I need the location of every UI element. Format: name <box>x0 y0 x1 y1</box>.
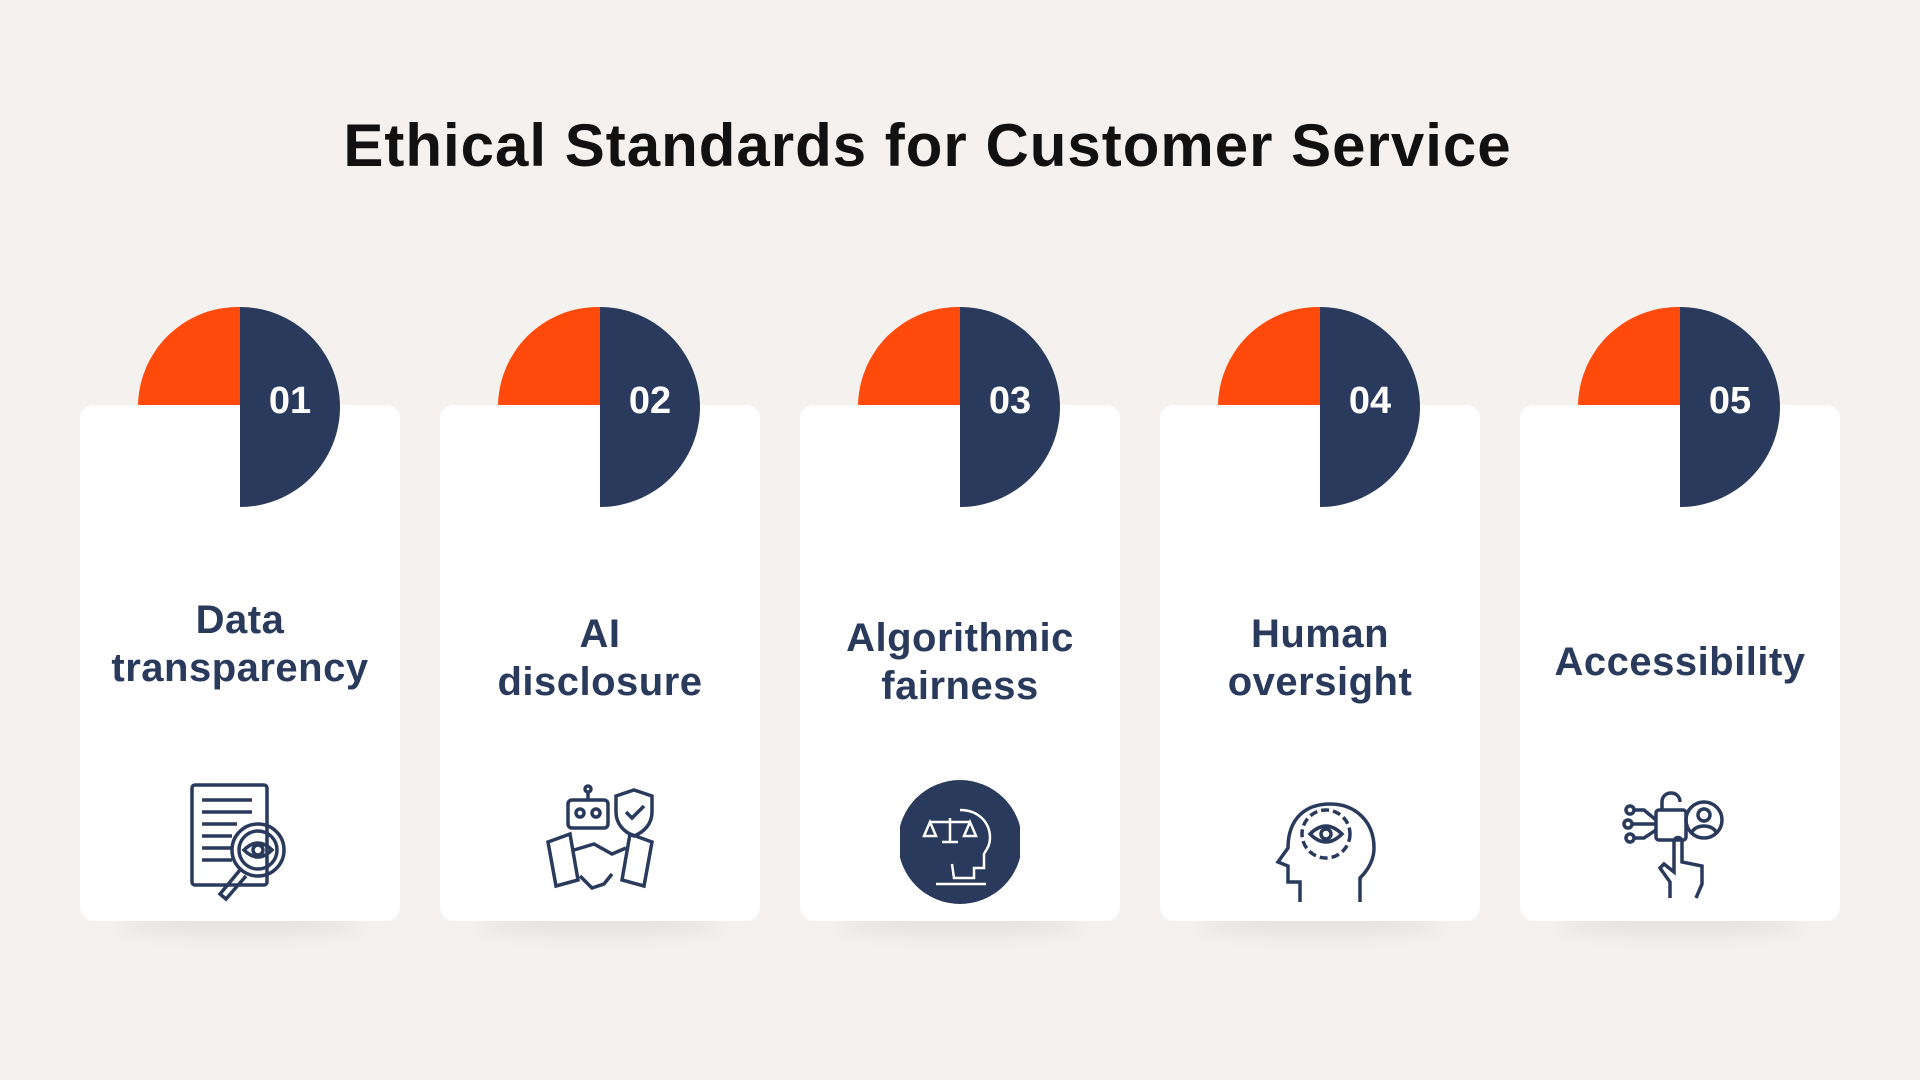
panel: 01 data transparency <box>80 307 400 934</box>
panel: 04 human oversight <box>1160 307 1480 934</box>
label: transparency <box>111 646 369 690</box>
panel: 05 accessibility <box>1520 307 1840 934</box>
panel: 03 algorithmic fairness <box>800 307 1120 934</box>
label: Accessibility <box>1554 640 1806 684</box>
label: Algorithmic <box>846 616 1074 660</box>
icon: head with scales in circle <box>900 780 1020 904</box>
number 01: 01 <box>269 380 311 422</box>
label: AI <box>580 612 620 656</box>
number 03: 03 <box>989 380 1031 422</box>
icon: document magnifier <box>190 783 286 902</box>
label: fairness <box>881 664 1039 708</box>
panel: 02 AI disclosure <box>440 307 760 934</box>
label: disclosure <box>497 660 703 704</box>
label <box>111 598 369 690</box>
icon: head with eye gear <box>1275 802 1376 902</box>
label <box>497 612 703 704</box>
label: Human <box>1251 612 1389 656</box>
number 05: 05 <box>1709 380 1751 422</box>
icon: lock, user, hand <box>1622 791 1724 899</box>
label <box>1228 612 1412 704</box>
title: Ethical Standards for Customer Service <box>343 112 1512 179</box>
label <box>846 616 1074 708</box>
icon: robot handshake <box>546 784 654 890</box>
number 02: 02 <box>629 380 671 422</box>
label: Data <box>196 598 284 642</box>
number 04: 04 <box>1349 380 1391 422</box>
label: oversight <box>1228 660 1412 704</box>
